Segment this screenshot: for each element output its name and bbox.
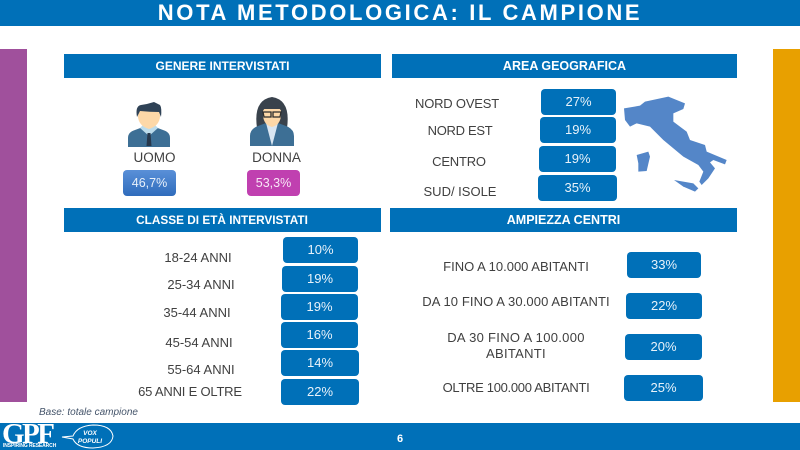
panel: genere intervistati [64,54,381,196]
value: 25-34: 19% [307,271,333,286]
value: sud e isole [538,175,617,201]
title bar [0,0,800,26]
value: 35-44: 19% [306,299,333,314]
value: 35-44 [281,294,358,320]
label: 18-24: 18-24 ANNI [164,250,232,265]
value: da 30 a 100.000 [625,334,702,360]
value: 65 e oltre [281,379,359,405]
label: sud e isole: SUD/ ISOLE [424,184,496,199]
panel: area geografica [392,54,737,201]
value: centro [539,146,616,172]
label: nord est: NORD EST [428,123,492,138]
heading: ampiezza centri: AMPIEZZA CENTRI [507,213,620,227]
label: uomo: UOMO [134,150,176,165]
logo wordmark: GPF [2,418,52,450]
icon: map of italy [624,96,727,192]
label: da 10 a 30.000: DA 10 FINO A 30.000 ABITANTI [422,294,610,309]
value: donna [247,170,300,196]
value: fino a 10.000 [627,252,701,278]
heading: area geografica [392,54,737,78]
left purple side bar [0,49,27,402]
label: oltre 100.000: OLTRE 100.000 ABITANTI [443,380,589,395]
value: 45-54 [281,322,358,348]
heading: classe di eta: CLASSE DI ETÀ INTERVISTATI [136,213,308,227]
base note: Base: totale campione [39,407,138,418]
heading: genere: GENERE INTERVISTATI [155,59,290,73]
label: 45-54: 45-54 ANNI [165,335,233,350]
label: fino a 10.000: FINO A 10.000 ABITANTI [443,259,589,274]
value: 55-64 [281,350,359,376]
value: oltre 100.000: 25% [650,380,677,395]
page number: 6 [397,433,403,445]
value: 25-34 [282,266,358,292]
value: da 10 a 30.000: 22% [651,298,677,313]
value: 55-64: 14% [307,355,333,370]
value: 18-24 [283,237,358,263]
icon: woman [250,97,294,146]
heading: area geografica: AREA GEOGRAFICA [503,59,626,73]
logo tagline: INSPIRING RESEARCH [3,443,56,449]
value: nord est [540,117,616,143]
icon: man [128,102,170,147]
value: nord est: 19% [565,122,591,137]
label: da 30 a 100.000: DA 30 FINO A 100.000 ABITANTI [447,330,585,361]
value: 18-24: 10% [307,242,334,257]
value: uomo: 46,7% [132,176,167,190]
footer bar [0,423,800,450]
heading: ampiezza centri [390,208,737,232]
value: sud e isole: 35% [564,180,591,195]
value: nord ovest [541,89,616,115]
right orange side bar [773,49,800,402]
label: 65 e oltre: 65 ANNI E OLTRE [138,384,242,399]
logo: vox populi bubble [62,424,114,448]
title bar: NOTA METODOLOGICA: IL CAMPIONE [158,0,642,25]
heading: classe di eta [64,208,381,232]
panel: ampiezza centri [390,208,737,401]
label: 35-44: 35-44 ANNI [163,305,231,320]
label: donna: DONNA [252,150,301,165]
label: 25-34: 25-34 ANNI [167,277,235,292]
value: 45-54: 16% [306,327,333,342]
heading: genere [64,54,381,78]
label: centro: CENTRO [432,154,486,169]
value: donna: 53,3% [256,176,291,190]
logo: vox populi bubble: VOX [83,430,98,437]
label: 55-64: 55-64 ANNI [167,362,235,377]
panel: classe di eta [64,208,381,405]
logo: GPF [2,418,56,450]
value: da 10 a 30.000 [626,293,702,319]
value: 65 e oltre: 22% [307,384,333,399]
value: nord ovest: 27% [565,94,592,109]
value: centro: 19% [564,151,591,166]
value: uomo [123,170,176,196]
label: nord ovest: NORD OVEST [415,96,499,111]
value: fino a 10.000: 33% [651,257,677,272]
value: oltre 100.000 [624,375,703,401]
value: da 30 a 100.000: 20% [650,339,677,354]
logo: vox populi bubble: POPULI [78,438,102,445]
